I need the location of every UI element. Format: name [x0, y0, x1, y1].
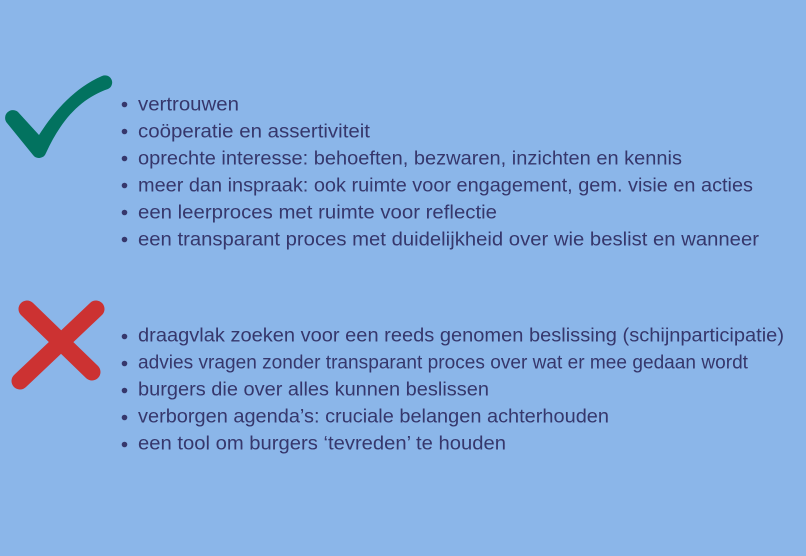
item: asking advice: advies vragen zonder transparant proces over wat er mee gedaan wordt	[138, 353, 749, 374]
item: citizens decide all: burgers die over alles kunnen beslissen	[138, 380, 489, 401]
icon: green check mark	[5, 75, 112, 158]
icon: red cross	[20, 309, 96, 381]
item: sincere interest: oprechte interesse: behoeften, bezwaren, inzichten en kennis	[138, 149, 682, 170]
item: more than consultation: meer dan inspraak: ook ruimte voor engagement, gem. visie en acties	[138, 176, 753, 197]
item: seeking support: draagvlak zoeken voor een reeds genomen beslissing (schijnparticipatie)	[138, 326, 784, 347]
item: tool: een tool om burgers ‘tevreden’ te houden	[138, 434, 506, 455]
item: hidden agendas: verborgen agenda’s: cruciale belangen achterhouden	[138, 407, 609, 428]
item: vertrouwen: vertrouwen	[138, 95, 239, 116]
list: negative points	[122, 326, 784, 455]
item: learning process: een leerproces met ruimte voor reflectie	[138, 203, 497, 224]
item: transparent process: een transparant proces met duidelijkheid over wie beslist en wanneer	[138, 230, 760, 251]
item: cooperation: coöperatie en assertiviteit	[138, 122, 371, 143]
list: positive points	[122, 95, 760, 251]
